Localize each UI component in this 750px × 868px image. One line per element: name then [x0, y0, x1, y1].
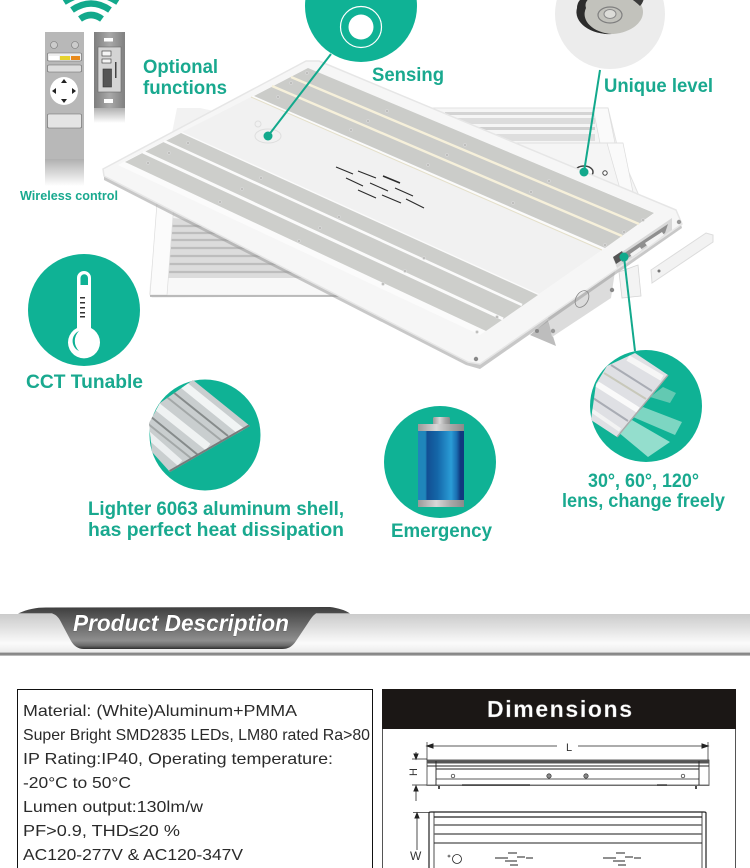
back fixture: lower left — [149, 108, 342, 298]
strip screws — [147, 72, 644, 333]
loose lens end cap — [651, 233, 713, 283]
label: unique level: Unique level — [604, 76, 713, 97]
icon: wifi signal — [64, 0, 118, 19]
circle: thermometer icon — [28, 254, 140, 366]
section banner: product description — [0, 607, 750, 656]
circle: battery icon — [384, 406, 496, 518]
panel: specifications — [18, 690, 372, 868]
circle: sensing — [305, 0, 417, 62]
label: lens options: 30°, 60°, 120° — [588, 471, 699, 492]
remote control — [45, 32, 84, 186]
label: lens options — [562, 471, 725, 512]
junction box under fixture — [530, 258, 641, 346]
heading: product description: Product Description — [73, 610, 289, 636]
main fixture — [103, 61, 682, 369]
label: aluminum shell — [88, 499, 344, 541]
ceiling vents — [336, 167, 424, 208]
label: aluminum shell: has perfect heat dissipation — [88, 520, 344, 541]
leader line: lens — [620, 252, 635, 351]
leader line: sensing — [264, 54, 331, 140]
circle: lens profile — [585, 350, 702, 462]
label: emergency: Emergency — [391, 521, 492, 542]
label: lens options: lens, change freely — [562, 491, 725, 512]
label: H: H — [408, 768, 420, 776]
back fixture: upper right — [420, 108, 640, 240]
label: cct tunable: CCT Tunable — [26, 372, 143, 393]
panel: specifications: AC120-277V & AC120-347V — [23, 847, 243, 864]
label: W: W — [410, 849, 422, 863]
circle: unique level — [555, 0, 665, 69]
label: aluminum shell: Lighter 6063 aluminum shell, — [88, 499, 344, 520]
circle: aluminum extrusion — [145, 375, 260, 490]
label: optional functions: Optional — [143, 57, 218, 78]
panel: specifications: IP Rating:IP40, Operating temperature: — [23, 751, 333, 768]
leader line: unique level — [580, 70, 600, 176]
heading: dimensions: Dimensions — [487, 696, 632, 722]
panel: specifications: Lumen output:130lm/w — [23, 799, 203, 816]
label: optional functions: functions — [143, 78, 227, 99]
label: L: L — [566, 742, 572, 754]
panel: dimensions — [382, 689, 736, 868]
diagram: side view — [412, 742, 709, 801]
label: sensing: Sensing — [372, 65, 444, 86]
panel: specifications: Material: (White)Aluminum+PMMA — [23, 703, 297, 720]
panel: specifications: PF>0.9, THD≤20 % — [23, 823, 180, 840]
wall switch — [94, 32, 125, 123]
end plate with lens slots — [474, 218, 681, 361]
diagram: top view — [413, 812, 706, 868]
label: wireless control: Wireless control — [20, 189, 118, 203]
panel: specifications: Super Bright SMD2835 LEDs, LM80 rated Ra>80 — [23, 727, 370, 744]
panel: specifications: -20°C to 50°C — [23, 775, 131, 792]
label: optional functions — [143, 57, 227, 99]
